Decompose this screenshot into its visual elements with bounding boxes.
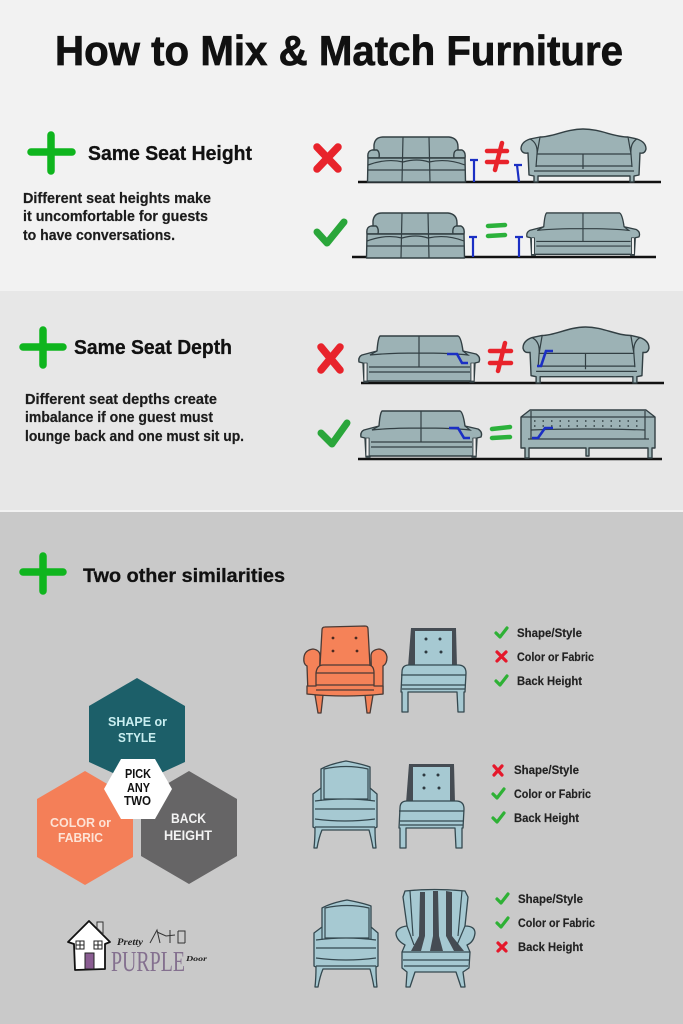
chair: striped wing chair (396, 890, 475, 987)
illustration: orange armchair and slipper chair (304, 626, 466, 713)
logo: pretty purple door: PURPLE (111, 946, 185, 978)
hexagon: pick any two: PICK (125, 767, 151, 781)
hexagon: shape or style (89, 678, 185, 784)
hexagon: back height (141, 771, 237, 884)
icon: red cross (321, 347, 340, 370)
hexagon: pick any two (104, 759, 172, 819)
panel: title background (0, 0, 683, 289)
checklist: row three: Back Height (518, 942, 583, 954)
panel: seat depth background (0, 291, 683, 510)
checklist: row two: Color or Fabric (514, 789, 592, 801)
text block: seat height explanation (23, 190, 211, 244)
diagram: pick any two hexagons (37, 678, 237, 885)
checklist: row one: Shape/Style (517, 628, 582, 640)
checklist: row three: Shape/Style (518, 894, 583, 906)
text block: seat height explanation: to have conversations. (23, 227, 175, 244)
checklist: row two (493, 765, 592, 825)
checklist: row three: Color or Fabric (518, 918, 596, 930)
title: How to Mix & Match Furniture (55, 27, 623, 74)
chair: orange armchair (304, 626, 387, 713)
hexagon: pick any two: ANY (127, 781, 151, 795)
heading: two other similarities: Two other similarities (83, 566, 285, 587)
text block: seat depth explanation (25, 391, 244, 445)
checklist: row one: Back Height (517, 676, 582, 688)
panel: same seat height (23, 129, 661, 258)
hexagon: pick any two: TWO (124, 794, 151, 808)
logo: pretty purple door (68, 921, 207, 978)
hexagon: shape or style: STYLE (118, 730, 156, 745)
icon: green check (317, 222, 344, 243)
diagram: unequal seat heights (358, 129, 661, 182)
chair: bergere chair (313, 761, 377, 848)
heading: same seat depth: Same Seat Depth (74, 336, 232, 359)
chair: bergere chair (314, 900, 378, 987)
text block: seat height explanation: it uncomfortable for guests (23, 208, 208, 225)
diagram: unequal seat depths (359, 327, 664, 383)
hexagon: color or fabric: COLOR or (50, 815, 111, 830)
panel: two other similarities (23, 556, 596, 987)
checklist: row three (497, 894, 596, 954)
icon: green plus (23, 556, 63, 591)
text block: seat depth explanation: Different seat depths create (25, 391, 217, 408)
checklist: row one (496, 628, 595, 688)
checklist: row one: Color or Fabric (517, 652, 595, 664)
heading: same seat height: Same Seat Height (88, 142, 252, 165)
hexagon: back height: BACK (171, 810, 206, 826)
icon: green plus (31, 135, 72, 171)
hexagon: shape or style: SHAPE or (108, 714, 167, 729)
checklist: row two: Shape/Style (514, 765, 579, 777)
diagram: equal seat depths (358, 410, 662, 459)
logo: pretty purple door: Door (185, 954, 207, 963)
hexagon: color or fabric: FABRIC (58, 830, 104, 845)
logo: pretty purple door: Pretty (117, 937, 144, 947)
hexagon: back height: HEIGHT (164, 827, 212, 843)
illustration: bergere and slipper chair (313, 761, 464, 848)
text block: seat depth explanation: lounge back and one must sit up. (25, 428, 244, 445)
diagram: equal seat heights (352, 213, 656, 258)
chair: slipper chair (399, 764, 464, 848)
icon: green check (321, 423, 347, 444)
checklist: row two: Back Height (514, 813, 579, 825)
illustration: bergere and striped wing chair (314, 890, 475, 987)
icon: green plus (23, 330, 63, 365)
chair: slipper chair (401, 628, 466, 712)
text block: seat height explanation: Different seat heights make (23, 190, 211, 207)
text block: seat depth explanation: imbalance if one guest must (25, 409, 213, 426)
icon: red cross (317, 147, 338, 169)
panel: same seat depth (23, 327, 664, 459)
panel: other similarities background (0, 512, 683, 1024)
hexagon: color or fabric (37, 771, 133, 885)
